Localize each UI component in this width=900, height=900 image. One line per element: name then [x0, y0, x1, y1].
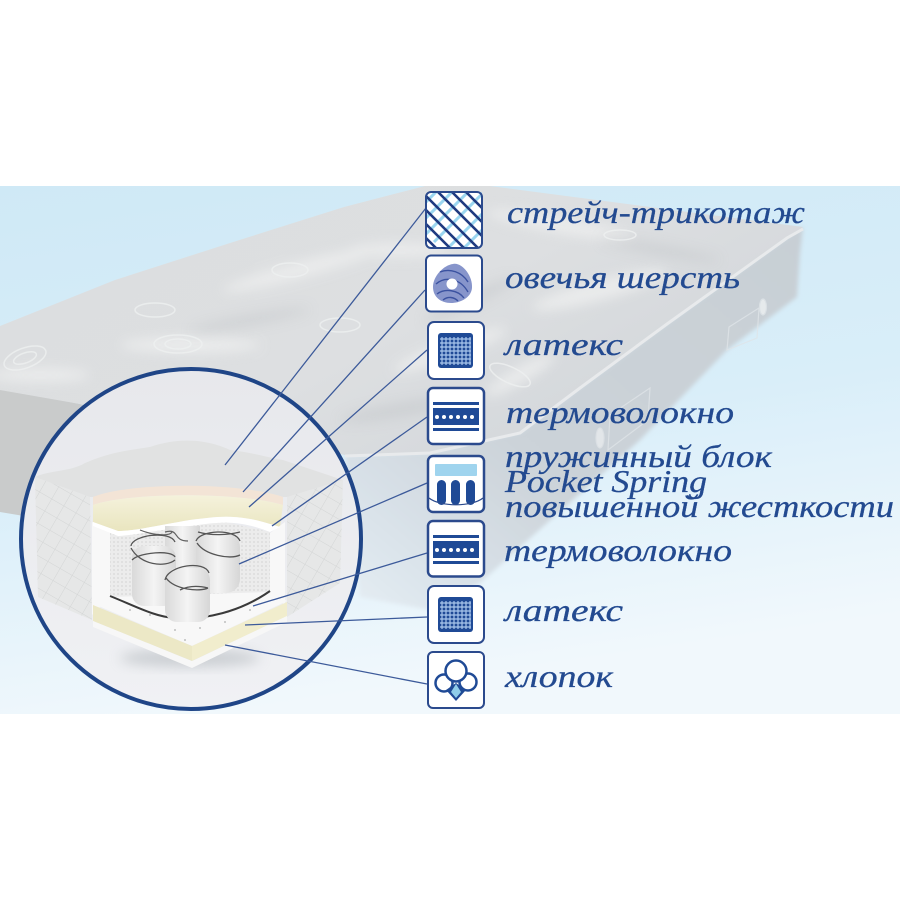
circle fill [21, 369, 361, 709]
back-right spring [196, 532, 240, 593]
bottom latex slab right [192, 602, 287, 661]
label: sheep wool: овечья шерсть [505, 259, 740, 295]
mattress left side face [0, 390, 83, 516]
label: stretch knit: стрейч-трикотаж [507, 194, 805, 230]
cutaway mattress [35, 441, 343, 668]
handle and vent details [596, 299, 766, 450]
line: latex bottom [245, 617, 427, 625]
white thermal band under foam [93, 517, 280, 536]
line: stretch knit [225, 208, 426, 465]
speckles [129, 609, 251, 641]
mattress photo [0, 186, 803, 610]
background band [0, 186, 900, 714]
icon: latex top [428, 322, 484, 379]
springs [131, 526, 240, 622]
inner back wall [110, 521, 270, 597]
label: pocket spring line 1: пружинный блок [505, 438, 773, 474]
mattress top surface [0, 186, 803, 455]
label: thermal fibre top: термоволокно [506, 394, 734, 430]
line: wool [243, 290, 425, 492]
circle outline [21, 369, 361, 709]
mattress right side face [345, 227, 803, 610]
back-centre spring [140, 526, 200, 568]
piping seam [345, 229, 803, 456]
magnifier circle [21, 369, 361, 709]
line: thermal top [272, 417, 427, 526]
line: thermal bottom [253, 553, 427, 606]
latex foam layer [93, 495, 283, 531]
label: latex top: латекс [503, 326, 623, 362]
left spring [131, 535, 176, 606]
line: latex top [249, 350, 427, 507]
icon: sheep wool [426, 256, 482, 312]
icon: stretch knit [422, 188, 488, 248]
leader lines [225, 208, 427, 684]
label: latex bottom: латекс [503, 592, 623, 628]
label: thermal fibre bottom: термоволокно [504, 532, 732, 568]
interior side walls [92, 522, 110, 614]
top quilted surface [35, 441, 343, 497]
pink wool layer [93, 486, 283, 505]
spring base wire [110, 591, 270, 618]
bottom latex slab left [93, 605, 192, 661]
left outer quilted panel [35, 477, 92, 620]
label: pocket spring line 2: Pocket Spring [504, 463, 707, 499]
icon: thermal fibre top [428, 388, 484, 444]
line: cotton [225, 645, 427, 684]
labels [503, 194, 894, 694]
cotton skirt [93, 616, 287, 668]
right outer quilted panel [287, 480, 343, 617]
bottom thermal fibre top [94, 592, 287, 646]
icon: pocket spring [428, 456, 484, 512]
icon: thermal fibre bottom [428, 521, 484, 576]
label: cotton: хлопок [504, 658, 614, 694]
slab shadow [120, 649, 260, 667]
label: pocket spring line 3: повышенной жесткости [505, 488, 894, 524]
icon: latex bottom [428, 586, 484, 643]
line: spring block [239, 483, 427, 564]
front spring [165, 566, 210, 622]
icon: cotton [428, 652, 484, 708]
quilting highlights [4, 212, 660, 418]
